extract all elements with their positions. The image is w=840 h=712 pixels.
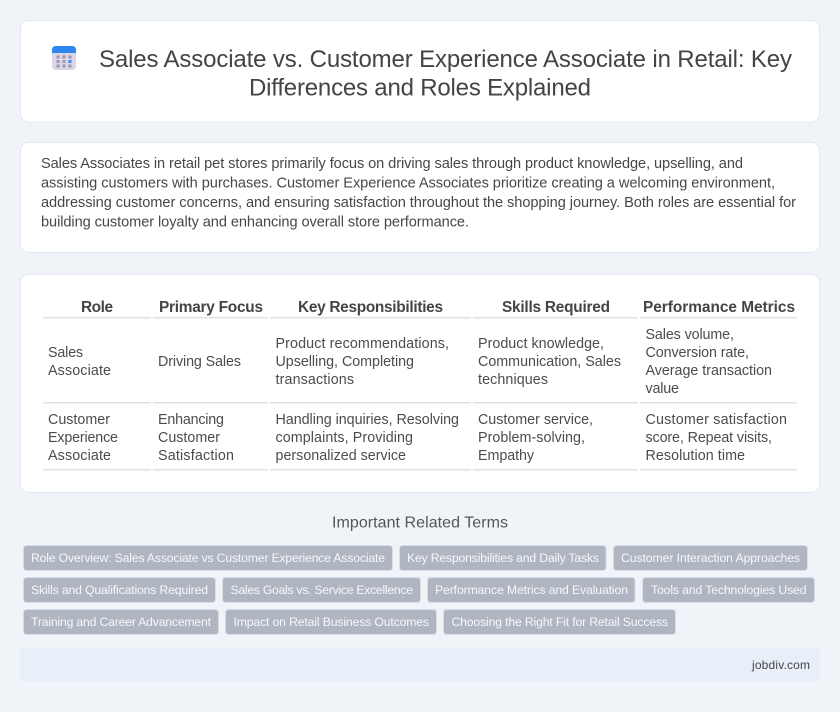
- tag list: related terms: [24, 546, 814, 634]
- title: Sales Associate vs. Customer Experience Associate in Retail: Key: [99, 46, 792, 73]
- tag: Key Responsibilities and Daily Tasks: [407, 551, 599, 565]
- panel: intro paragraph: [20, 142, 820, 252]
- tag: [24, 610, 218, 634]
- tag: Customer Interaction Approaches: [621, 551, 800, 565]
- table header row: [43, 299, 797, 318]
- heading: important related terms: Important Related Terms: [332, 514, 508, 532]
- tag: [24, 578, 216, 602]
- table header row: Key Responsibilities: [298, 299, 443, 316]
- table row: Sales Associate: Upselling, Completing: [276, 354, 414, 370]
- title: [99, 46, 792, 102]
- tag: Skills and Qualifications Required: [31, 583, 208, 597]
- table header row: Role: [81, 299, 113, 316]
- table row: Customer Experience Associate: Handling inquiries, Resolving: [276, 412, 459, 428]
- table row: Customer Experience Associate: Associate: [48, 448, 111, 464]
- panel: intro paragraph: Sales Associates in retail pet stores primarily focus on driving sales through product knowledge, upselling, and: [41, 156, 743, 172]
- tag: [642, 578, 814, 602]
- table row: Customer Experience Associate: Customer satisfaction: [646, 412, 787, 428]
- tag: Choosing the Right Fit for Retail Success: [452, 615, 668, 629]
- table header row: Performance Metrics: [643, 299, 795, 316]
- table row: Sales Associate: Associate: [48, 363, 111, 379]
- tag: Performance Metrics and Evaluation: [435, 583, 628, 597]
- title: Differences and Roles Explained: [249, 74, 591, 102]
- tag: [428, 578, 635, 602]
- tag: [226, 610, 436, 634]
- panel: intro paragraph: addressing customer concerns, and ensuring satisfaction throughout the shopping journey. Both roles are essential for: [41, 195, 796, 211]
- table row: Sales Associate: Sales volume,: [646, 327, 734, 343]
- table row: Customer Experience Associate: Satisfaction: [158, 448, 234, 464]
- table row: Sales Associate: techniques: [478, 372, 548, 388]
- table row: Sales Associate: Product knowledge,: [478, 336, 604, 352]
- table row: Customer Experience Associate: [43, 412, 797, 470]
- footer: jobdiv.com: [751, 658, 810, 672]
- tag: [400, 546, 606, 570]
- table header row: Primary Focus: [159, 299, 263, 316]
- table row: Customer Experience Associate: Problem-solving,: [478, 430, 585, 446]
- table row: Customer Experience Associate: personalized service: [276, 448, 406, 464]
- tag: Role Overview: Sales Associate vs Customer Experience Associate: [31, 551, 385, 565]
- tag: [222, 578, 420, 602]
- panel: comparison table: [20, 274, 820, 492]
- tag: Impact on Retail Business Outcomes: [234, 615, 429, 629]
- table row: Customer Experience Associate: Customer service,: [478, 412, 593, 428]
- table row: Customer Experience Associate: Customer: [158, 430, 220, 446]
- tag: Sales Goals vs. Service Excellence: [230, 583, 413, 597]
- tag: [24, 546, 392, 570]
- table row: Sales Associate: Conversion rate,: [646, 345, 749, 361]
- tag: Tools and Technologies Used: [651, 583, 806, 597]
- panel: intro paragraph: building customer loyalty and enhancing overall store performance.: [41, 214, 469, 230]
- table row: Sales Associate: [43, 327, 797, 404]
- panel: header: [20, 20, 820, 122]
- table header row: Skills Required: [502, 299, 610, 316]
- table row: Customer Experience Associate: Resolution time: [646, 448, 745, 464]
- table row: Sales Associate: Product recommendations,: [276, 336, 449, 352]
- footer: [20, 648, 820, 682]
- tag: [614, 546, 808, 570]
- table row: Customer Experience Associate: complaints, Providing: [276, 430, 413, 446]
- tag: [444, 610, 676, 634]
- table row: Customer Experience Associate: score, Repeat visits,: [646, 430, 772, 446]
- table row: Sales Associate: transactions: [276, 372, 354, 388]
- table row: Sales Associate: value: [646, 381, 679, 397]
- table row: Sales Associate: Communication, Sales: [478, 354, 621, 370]
- table row: Sales Associate: Average transaction: [646, 363, 772, 379]
- icon: calendar: [52, 46, 76, 70]
- tag: Training and Career Advancement: [31, 615, 212, 629]
- table row: Customer Experience Associate: Empathy: [478, 448, 535, 464]
- table row: Customer Experience Associate: Enhancing: [158, 412, 224, 428]
- panel: intro paragraph: assisting customers with purchases. Customer Experience Associates prioritize creating a welcoming environment,: [41, 176, 775, 192]
- table row: Sales Associate: Sales: [48, 345, 83, 361]
- table row: Customer Experience Associate: Experience: [48, 430, 118, 446]
- table row: Sales Associate: Driving Sales: [158, 354, 241, 370]
- table row: Customer Experience Associate: Customer: [48, 412, 110, 428]
